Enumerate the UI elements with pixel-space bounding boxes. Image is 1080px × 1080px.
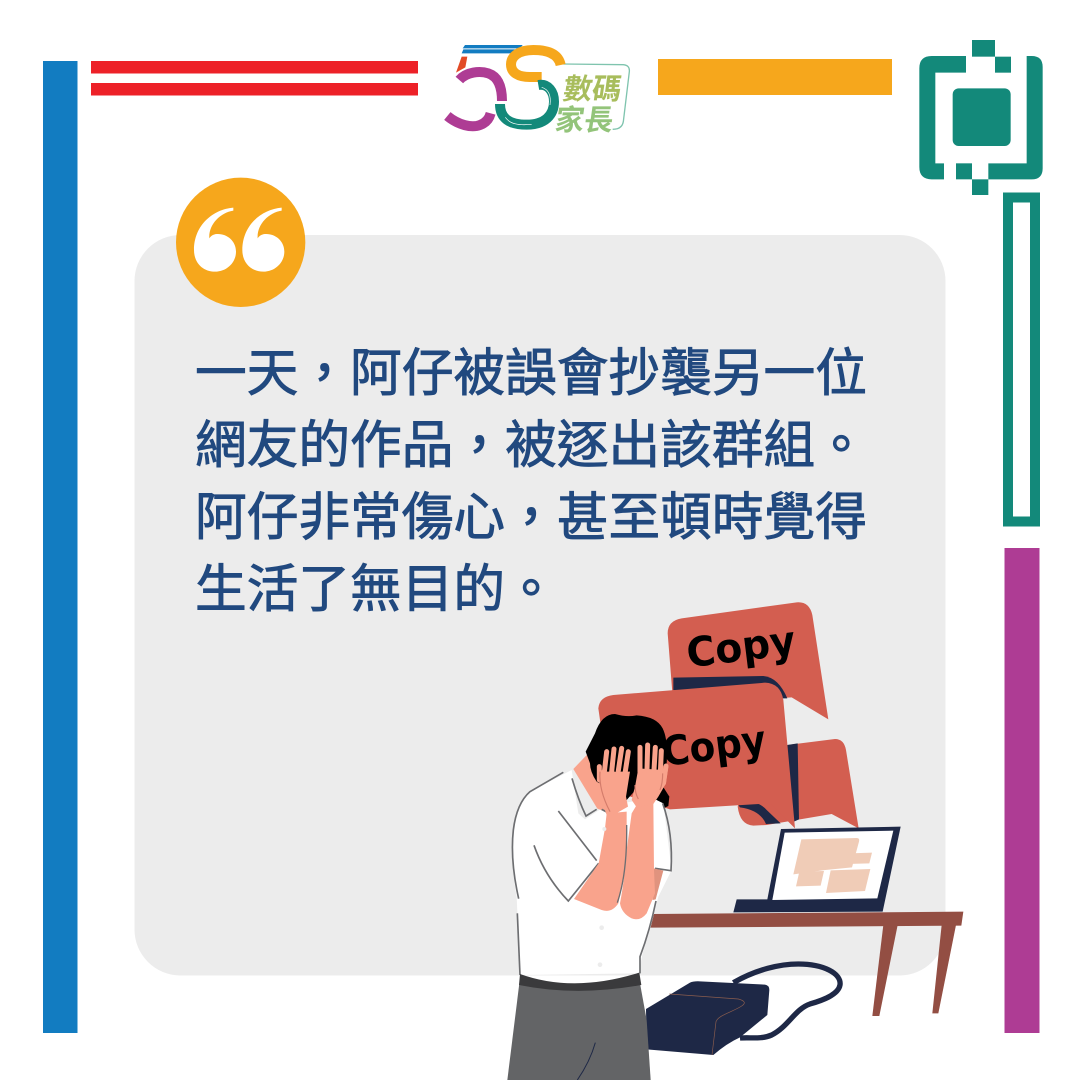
illustration: copy bubbles [598, 602, 859, 828]
label top: Copy [684, 616, 798, 677]
neck and face [573, 754, 630, 813]
blue side bar [43, 61, 78, 1033]
icon: teal pixel frame [919, 40, 1043, 195]
arm divider line [617, 825, 627, 903]
left arm [574, 812, 627, 911]
quote text [195, 344, 867, 618]
shirt [512, 770, 672, 975]
quote text: 網友的作品，被逐出該群組。 [195, 416, 867, 474]
quote text: 生活了無目的。 [195, 560, 557, 618]
illustration: bag [646, 964, 840, 1055]
quote text: 阿仔非常傷心，甚至頓時覺得 [195, 488, 867, 546]
collar [572, 768, 602, 819]
hand creases [600, 772, 663, 812]
buttons [598, 827, 606, 967]
back top bubble [668, 602, 828, 719]
shirt lines [512, 772, 671, 975]
front bubble [598, 683, 795, 828]
navy shadow lower [738, 802, 781, 824]
panel: grey quote card [134, 235, 946, 976]
logo text [553, 73, 624, 137]
belt [519, 973, 641, 991]
label front: Copy [659, 716, 768, 776]
logo text: 家長 [553, 104, 616, 137]
trousers [507, 983, 651, 1080]
illustration: table [650, 912, 963, 1016]
left hand [598, 748, 630, 815]
purple side bar [1004, 548, 1040, 1033]
navy shadow right bubble [787, 743, 799, 823]
right bubble [738, 739, 859, 828]
orange bar [658, 59, 892, 95]
right arm [620, 802, 655, 919]
hair back [653, 777, 669, 808]
arm shadow [653, 868, 663, 900]
quote text: 一天，阿仔被誤會抄襲另一位 [195, 344, 867, 402]
hair [586, 714, 667, 800]
illustration: person [507, 714, 672, 1080]
red double bars [91, 61, 418, 96]
logo text: 數碼 [561, 73, 624, 106]
navy shadow top bubble [673, 676, 787, 698]
icon: quote badge [176, 178, 305, 307]
illustration: laptop [733, 827, 901, 912]
right hand [632, 745, 668, 807]
teal outlined bar [1008, 198, 1035, 522]
logo: 55 digital parents [447, 45, 629, 129]
